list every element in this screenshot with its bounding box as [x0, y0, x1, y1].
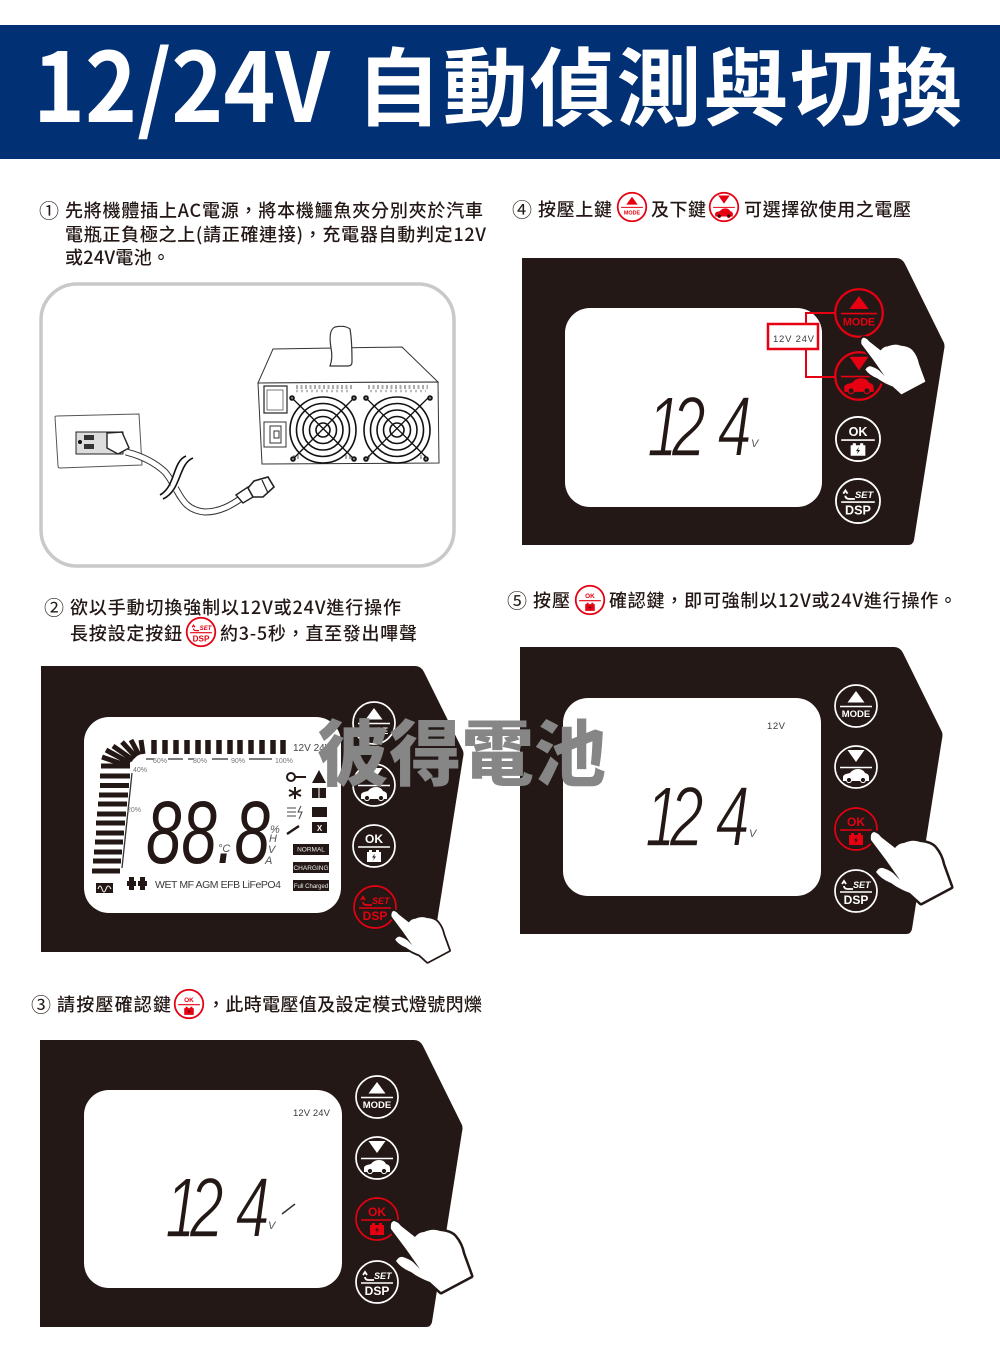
step 4 instruction: 及下鍵 [651, 196, 706, 222]
icon: charger rear view [258, 326, 439, 464]
LCD screen all segments: A [264, 855, 272, 867]
button: ok: OK [849, 425, 867, 439]
button: down [353, 764, 395, 806]
step 4 instruction [512, 193, 911, 222]
LCD screen all segments: 12V 24V [293, 743, 332, 754]
LCD screen: 124 [165, 1160, 270, 1255]
LCD screen all segments: 100% [275, 758, 293, 765]
step 2 instruction: 欲以手動切換強制以12V或24V進行操作 [70, 594, 401, 620]
button: mode: MODE [842, 709, 870, 720]
step 3 instruction: 請按壓確認鍵 [57, 991, 171, 1017]
step 3 instruction: ，此時電壓值及設定模式燈號閃爍 [207, 991, 482, 1017]
step 2 instruction: 長按設定按鈕 [70, 620, 182, 646]
icon: set dsp small: DSP [193, 635, 210, 644]
panel: charger connection illustration [41, 284, 454, 566]
LCD screen: V [268, 1220, 277, 1232]
LCD screen: V [749, 828, 758, 840]
button: set dsp highlighted: SET [372, 896, 391, 906]
button: set dsp: DSP [844, 893, 868, 907]
LCD screen all segments: 40% [133, 767, 147, 774]
LCD screen [565, 308, 822, 507]
LCD screen: V [751, 438, 760, 450]
button: mode highlighted: MODE [843, 316, 875, 328]
LCD screen all segments: % [270, 824, 280, 836]
LCD screen all segments: CHARGING [293, 865, 329, 872]
LCD screen: 124 [645, 769, 750, 864]
button: mode: MODE [360, 726, 388, 737]
panel: LCD confirmed 12V [520, 647, 951, 934]
icon: set dsp small [187, 618, 215, 646]
step 1 instruction: 電瓶正負極之上(請正確連接)，充電器自動判定12V [65, 221, 486, 247]
step 1 instruction: 或24V電池。 [65, 244, 170, 270]
button: mode [835, 685, 877, 727]
button: ok [353, 825, 395, 867]
button: mode [353, 702, 395, 744]
LCD screen all segments: WET MF AGM EFB LiFePO4 [155, 879, 281, 891]
LCD screen all segments: 20% [127, 807, 141, 814]
icon: pressing hand [861, 338, 925, 394]
LCD screen all segments: °C [218, 843, 230, 855]
callout: 12V 24V red box [768, 313, 836, 377]
readout digits: 88.8 [146, 782, 270, 882]
button: set dsp: SET [853, 880, 872, 890]
button: set dsp highlighted: DSP [363, 909, 387, 923]
icon: ok small [576, 586, 604, 614]
icon: pressing hand [391, 911, 449, 962]
button: down [356, 1137, 398, 1179]
button: set dsp [356, 1261, 398, 1303]
step 5 instruction: 確認鍵，即可強制以12V或24V進行操作。 [609, 587, 957, 613]
LCD screen: 12V 24V [293, 1108, 331, 1119]
status icons [287, 770, 327, 834]
title banner [0, 11, 1000, 159]
progress bar left [92, 766, 130, 871]
panel: LCD blinking 12V 24V [40, 1040, 471, 1327]
LCD screen all segments [84, 717, 341, 913]
LCD screen all segments: H [269, 833, 277, 845]
button: ok: OK [365, 832, 383, 846]
title banner: 12/24V [33, 11, 331, 150]
callout: 12V 24V red box: 12V 24V [773, 334, 815, 345]
step 4 instruction: 可選擇欲使用之電壓 [744, 196, 911, 222]
button: ok highlighted [356, 1198, 398, 1240]
icon: ok small: OK [585, 593, 595, 600]
status icons: X [317, 824, 323, 833]
button: set dsp [835, 870, 877, 912]
LCD screen: 12V [767, 721, 786, 732]
LCD screen all segments: NORMAL [297, 846, 325, 854]
LCD screen all segments: 90% [231, 758, 245, 765]
step 4 instruction: ④ [512, 199, 532, 222]
icon: down small [710, 193, 738, 221]
icon: wall outlet [55, 414, 142, 468]
LCD screen [84, 1090, 342, 1288]
button: mode: MODE [363, 1100, 391, 1111]
step 3 instruction [31, 990, 482, 1018]
button: set dsp [836, 479, 880, 523]
LCD screen all segments: Full Charged [294, 884, 328, 890]
button: ok highlighted [835, 808, 877, 850]
button: down highlighted [835, 352, 883, 400]
icon: pressing hand [391, 1221, 471, 1292]
panel: LCD selecting voltage [522, 258, 944, 545]
icon: mode small [618, 193, 646, 221]
step 1 instruction [39, 197, 486, 270]
button: set dsp: SET [374, 1271, 393, 1281]
step 2 instruction: 約3-5秒，直至發出嗶聲 [220, 620, 417, 646]
step 5 instruction: 按壓 [533, 587, 570, 613]
title banner: 自動偵測與切換 [356, 21, 962, 144]
step 5 instruction: ⑤ [507, 590, 527, 613]
icon: ok small: OK [184, 997, 194, 1004]
button: ok [836, 417, 880, 461]
button: set dsp: DSP [845, 504, 871, 518]
progress bar corner [102, 740, 143, 766]
icon: mode small: MODE [624, 210, 641, 216]
button: set dsp: DSP [365, 1284, 389, 1298]
step 1 instruction: ① [39, 200, 59, 223]
button: mode highlighted [835, 289, 883, 337]
LCD screen all segments: 80% [193, 758, 207, 765]
step 2 instruction [44, 594, 417, 646]
icon: ok small [175, 990, 203, 1018]
watermark: 彼得電池 [317, 696, 606, 801]
icon: fan right [364, 396, 432, 463]
LCD screen: 124 [647, 379, 752, 474]
button: set dsp: SET [855, 490, 874, 501]
icon: power cable [126, 452, 274, 512]
button: down [835, 746, 877, 788]
LCD screen [563, 698, 821, 896]
icon: set dsp small: SET [200, 625, 213, 632]
icon: pressing hand [871, 832, 951, 903]
step 3 instruction: ③ [31, 994, 51, 1017]
button: ok highlighted: OK [368, 1205, 386, 1219]
LCD screen all segments: V [268, 844, 277, 856]
LCD screen all segments: 60% [153, 758, 167, 765]
button: mode [356, 1076, 398, 1118]
icon: fan left [290, 396, 356, 463]
step 1 instruction: 先將機體插上AC電源，將本機鱷魚夾分別夾於汽車 [65, 197, 483, 223]
button: ok highlighted: OK [847, 815, 865, 829]
panel: full LCD with set button [41, 666, 464, 962]
progress bar top [154, 740, 283, 754]
button: set dsp highlighted [354, 886, 396, 928]
step 4 instruction: 按壓上鍵 [538, 196, 612, 222]
step 2 instruction: ② [44, 597, 64, 620]
